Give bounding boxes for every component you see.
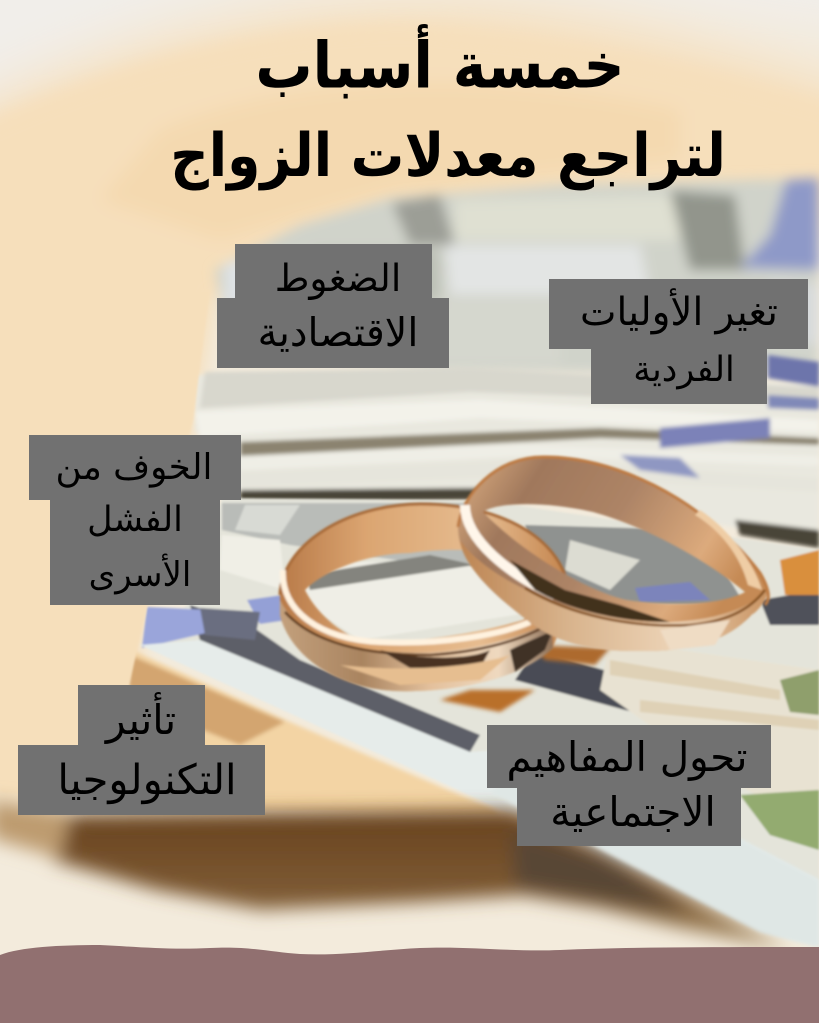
label: fear of family failure: الأسرى	[89, 555, 191, 595]
label: economic pressures	[217, 244, 449, 368]
banknote under the rings	[140, 498, 819, 945]
label: effect of technology: التكنولوجيا	[57, 755, 237, 804]
bottom wave band	[0, 945, 819, 1023]
top blur	[0, 0, 819, 230]
left ring	[280, 504, 567, 691]
label: changing individual priorities: تغير الأوليات	[580, 290, 778, 335]
label: economic pressures: الضغوط	[275, 256, 401, 300]
tan shaded flap under the bill	[128, 650, 500, 815]
label: effect of technology	[18, 685, 265, 815]
shadow below envelope	[0, 800, 790, 950]
right ring	[458, 457, 768, 651]
label: fear of family failure: الخوف من	[56, 447, 212, 488]
envelope edge repaint	[0, 290, 210, 800]
icon: wedding rings	[280, 457, 768, 691]
label: changing individual priorities: الفردية	[633, 350, 735, 390]
reflections beneath rings	[440, 645, 610, 712]
label: changing individual priorities	[549, 279, 808, 404]
envelope	[0, 25, 819, 820]
label: shifting social concepts: تحول المفاهيم	[506, 733, 748, 781]
label: effect of technology: تأثير	[106, 696, 176, 744]
label: fear of family failure: الفشل	[87, 500, 183, 540]
title	[170, 24, 726, 191]
title: خمسة أسباب	[255, 29, 625, 103]
bill edge sharp at lower right	[490, 745, 819, 948]
label: shifting social concepts: الاجتماعية	[550, 788, 716, 836]
far banknotes, out of focus	[215, 178, 819, 375]
title: لتراجع معدلات الزواج	[170, 120, 726, 191]
label: economic pressures: الاقتصادية	[258, 310, 418, 356]
stack of bills	[195, 355, 819, 548]
label: fear of family failure	[29, 435, 241, 605]
label: shifting social concepts	[487, 725, 771, 846]
